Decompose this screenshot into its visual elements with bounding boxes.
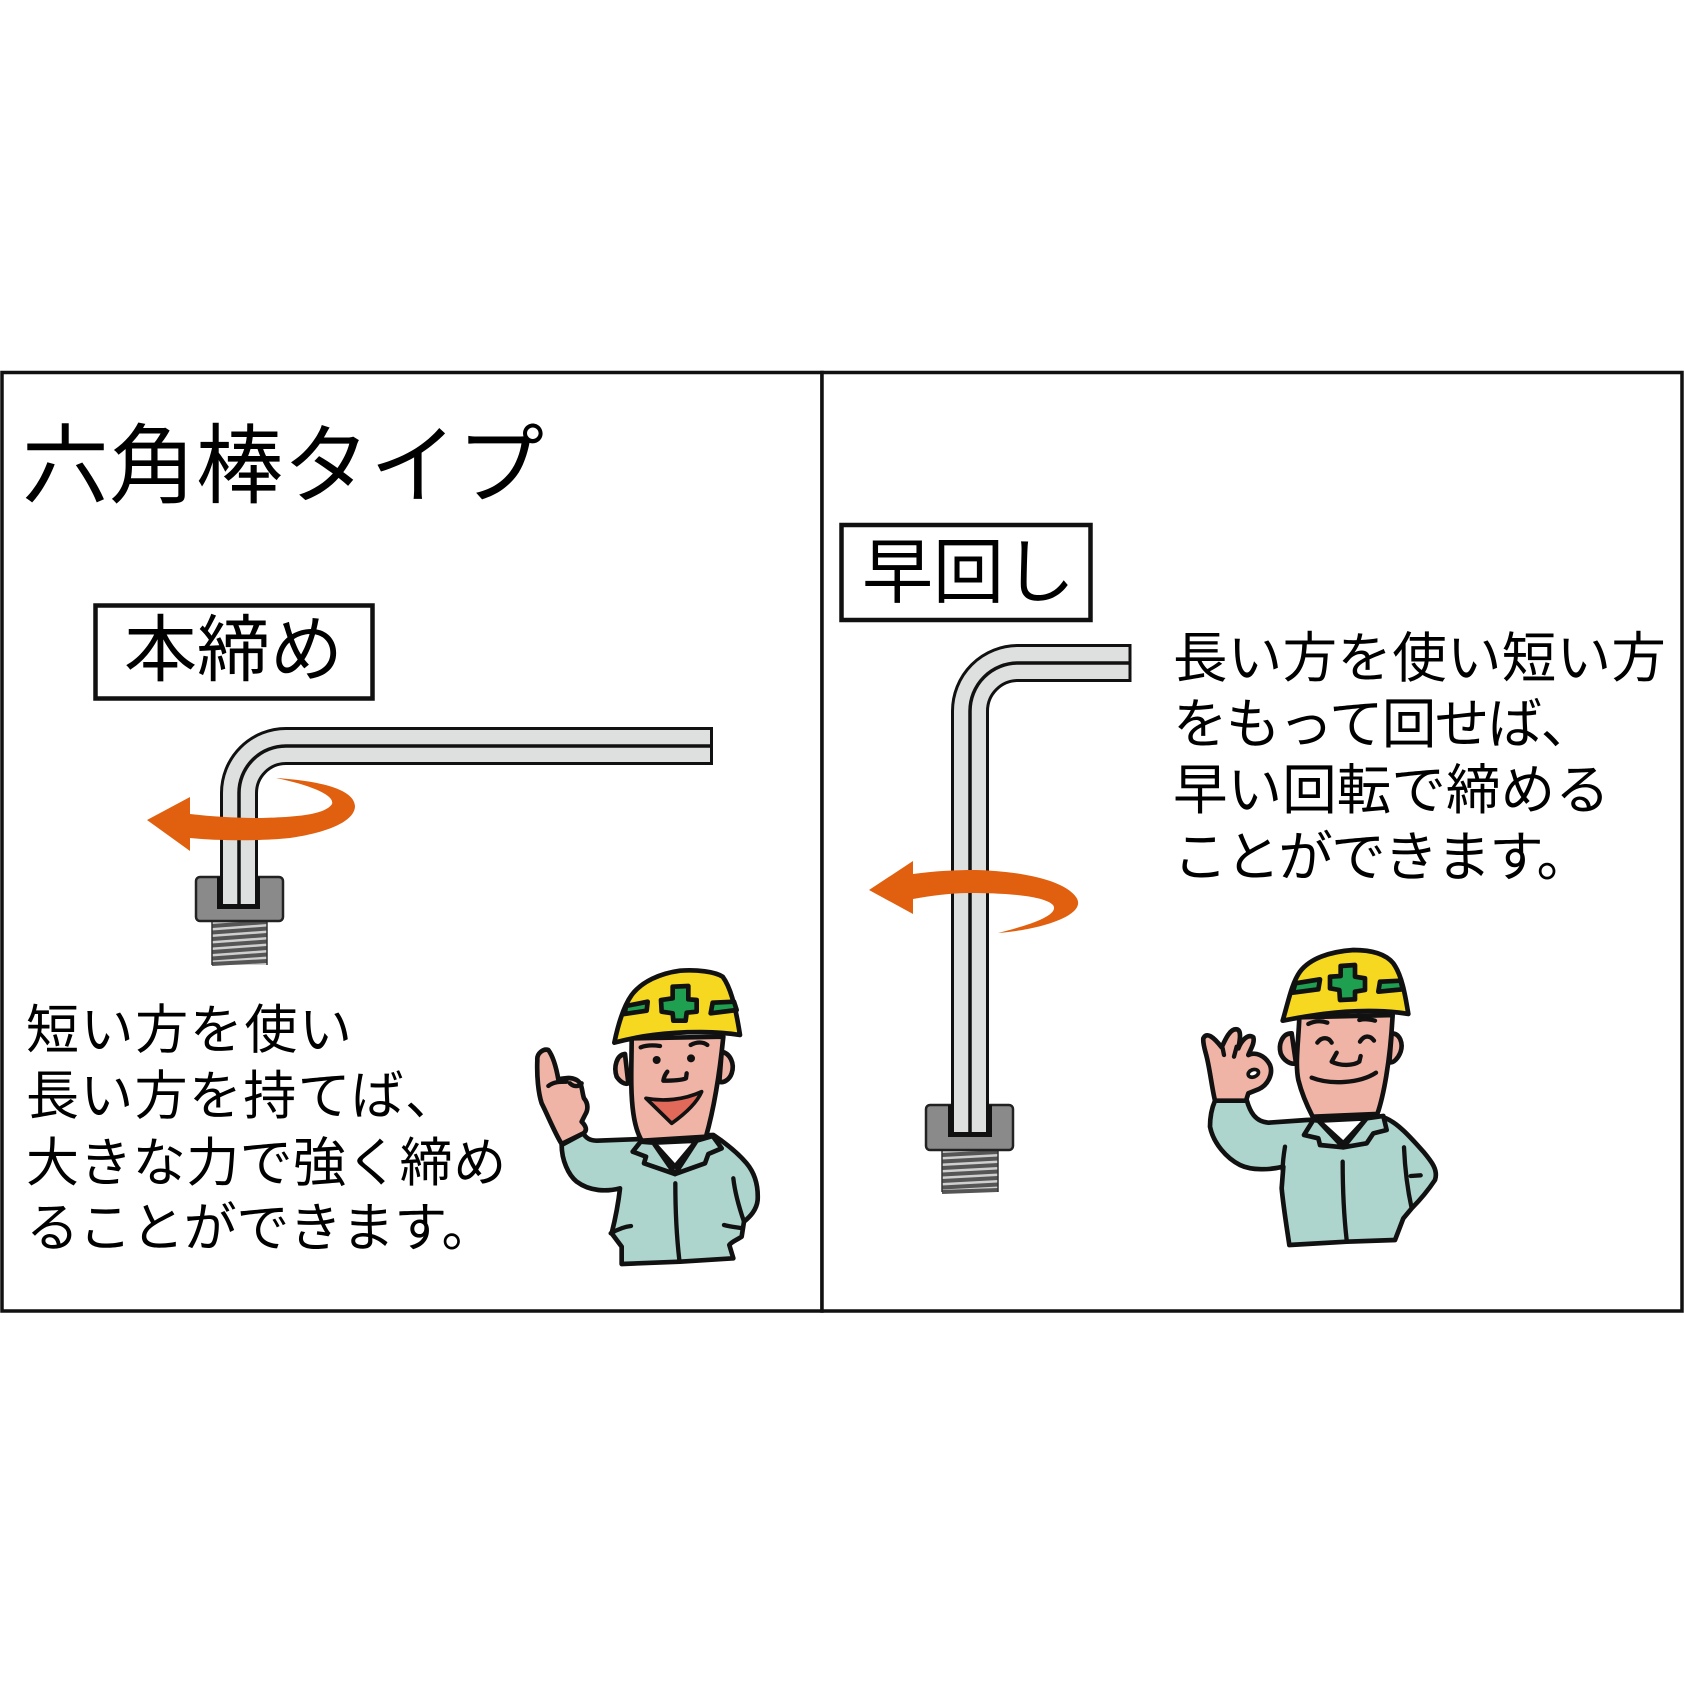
facial features [641,1042,707,1081]
icon: worker making OK sign [1203,950,1436,1245]
text block: 本締め description: 短い方を使い [26,1001,354,1060]
text block: 本締め description [26,1001,507,1258]
title: 六角棒タイプ [22,418,544,515]
mouth [646,1092,702,1123]
face [631,1037,723,1141]
text block: 早回し description: ことができます。 [1173,827,1589,888]
helmet [1283,950,1408,1021]
ears [1280,1033,1296,1064]
icon: bolt and nut [926,1105,1013,1192]
icon: worker pointing up [537,970,758,1264]
text block: 早回し description: 長い方を使い短い方 [1173,628,1666,689]
text block: 早回し description: 早い回転で締める [1173,760,1610,821]
arrow: rotation [147,778,355,851]
text block: 本締め description: 長い方を持てば、 [26,1067,459,1126]
text block: 本締め description: 大きな力で強く締め [26,1134,507,1193]
jacket lines [1283,1147,1421,1240]
text block: 早回し description: をもって回せば、 [1173,694,1593,755]
icon: hex wrench long end down [970,663,1132,1135]
text block: 早回し description [1173,628,1666,888]
ears [615,1054,628,1084]
face [1297,1015,1393,1117]
jacket lines [611,1178,744,1260]
collar [653,1141,697,1167]
arrow: rotation [869,861,1078,933]
label box: 早回し: 早回し [862,534,1075,613]
text block: 本締め description: ることができます。 [26,1199,494,1258]
hand [1203,1029,1271,1101]
collar [1318,1118,1367,1143]
icon: bolt and nut [196,877,283,965]
label box: 本締め [96,606,372,698]
icon: hex wrench short end down [239,746,713,907]
jacket [562,1133,758,1264]
helmet [614,970,740,1043]
hand [537,1050,587,1144]
label box: 本締め: 本締め [124,610,343,691]
jacket [1210,1100,1436,1245]
panel: 早回し right panel [822,372,1682,1311]
facial features [1308,1019,1376,1082]
panel: 本締め left panel [2,372,822,1311]
